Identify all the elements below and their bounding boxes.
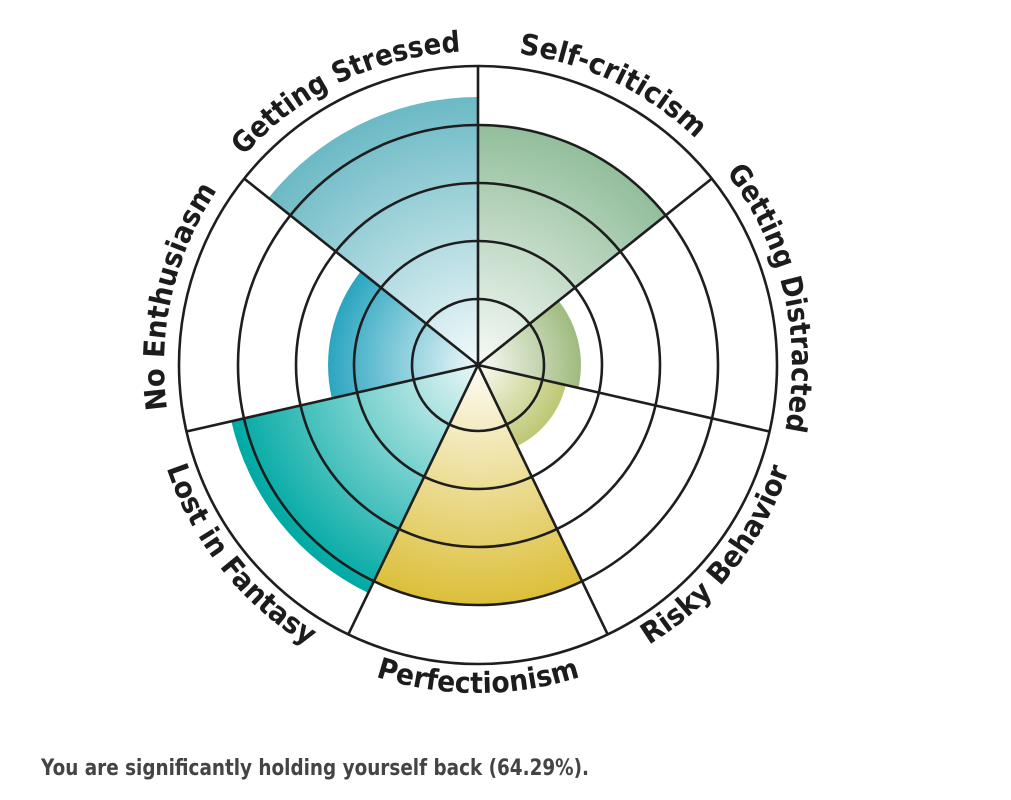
sector: No Enthusiasm [328, 272, 478, 398]
sector: Perfectionism [374, 365, 582, 605]
label: Lost in Fantasy: Lost in Fantasy [167, 463, 316, 646]
label: Getting Stressed: Getting Stressed [233, 30, 458, 152]
sector: Getting Distracted [478, 301, 581, 388]
label: No Enthusiasm: No Enthusiasm [143, 185, 216, 410]
sector: Self-criticism [478, 124, 666, 365]
sector: Getting Stressed [268, 97, 478, 365]
label: Risky Behavior: Risky Behavior [640, 464, 787, 644]
label: Self-criticism: Self-criticism [521, 34, 704, 138]
sector: Lost in Fantasy [231, 365, 478, 593]
wheel grid: rings and spokes [179, 66, 777, 664]
sector: Risky Behavior [478, 365, 566, 446]
label: Perfectionism: Perfectionism [378, 657, 578, 694]
label: Getting Distracted: Getting Distracted [730, 164, 812, 432]
result text: You are significantly holding yourself back (64.29%). [40, 756, 589, 781]
data sectors [231, 97, 666, 605]
